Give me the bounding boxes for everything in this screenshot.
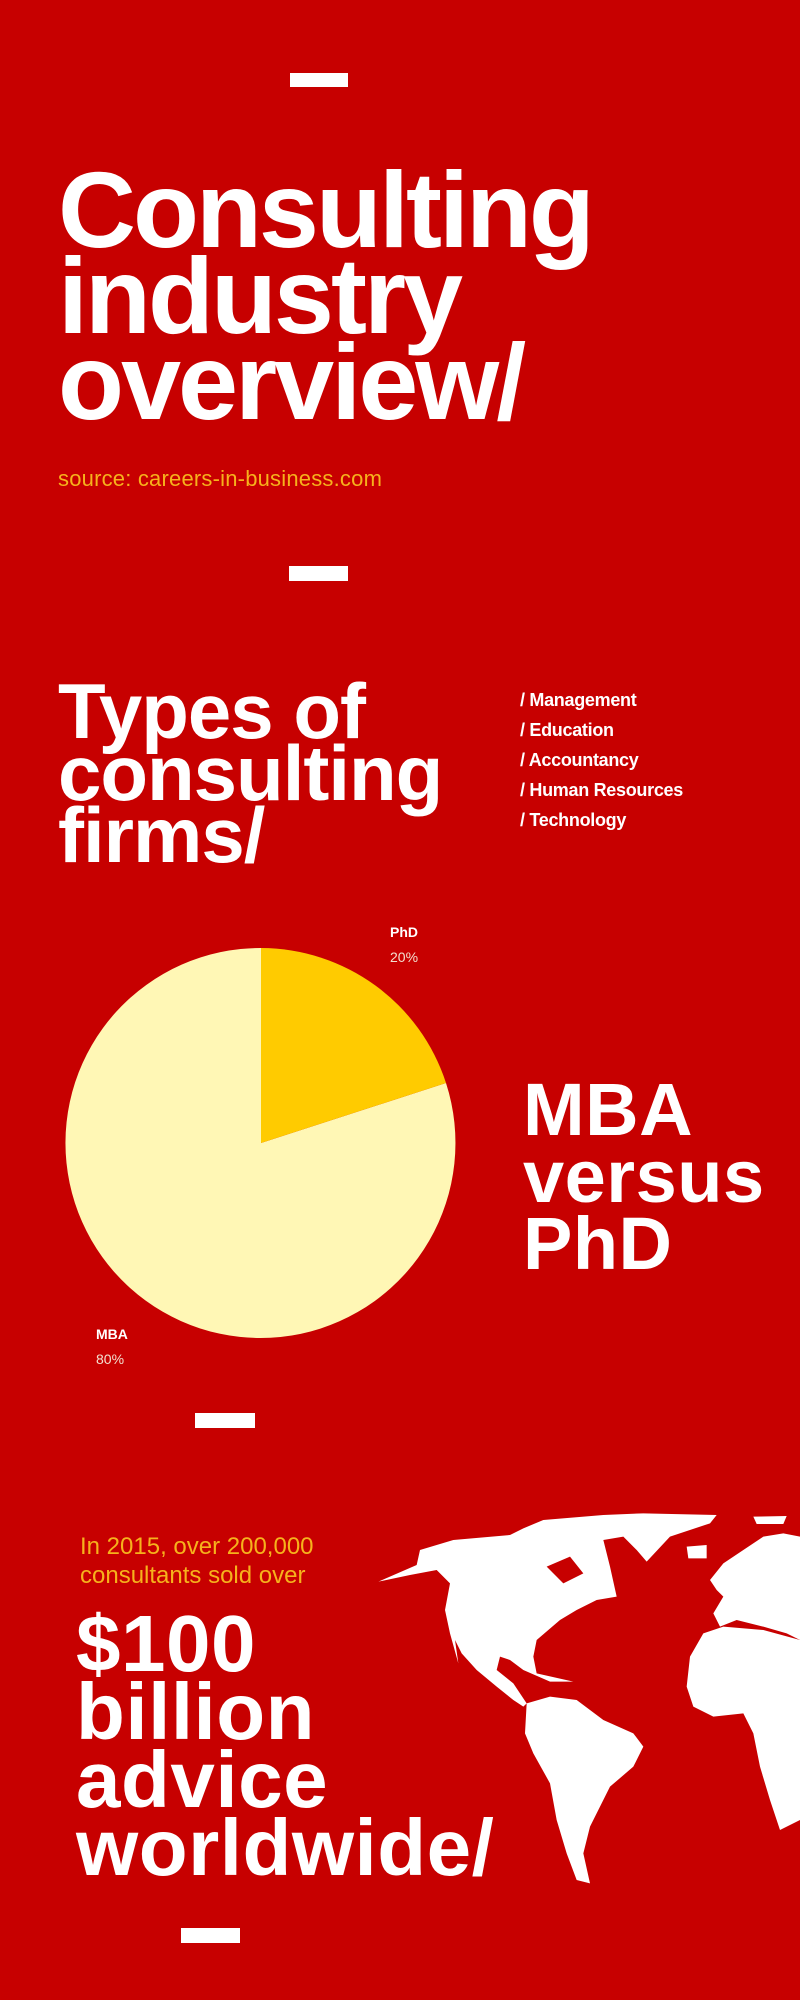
divider dash 2 <box>289 566 348 581</box>
label: PhD 20%: PhD <box>390 924 418 940</box>
title: industry <box>58 235 460 356</box>
heading: MBA versus PhD: PhD <box>523 1202 672 1285</box>
heading: MBA versus PhD: versus <box>523 1135 765 1218</box>
label: MBA 80%: MBA <box>96 1326 128 1342</box>
list: firm types <box>520 690 683 830</box>
headline: $100 billion advice worldwide: advice <box>76 1735 328 1824</box>
intro text: consultants: In 2015, over 200,000 <box>80 1533 314 1560</box>
heading: types of consulting firms <box>58 667 442 879</box>
list: firm types: / Human Resources <box>520 780 683 800</box>
icon: world map <box>378 1513 800 1884</box>
divider dash 4 <box>181 1928 240 1943</box>
heading: types of consulting firms: firms/ <box>58 791 264 879</box>
North America <box>378 1513 800 1883</box>
heading: MBA versus PhD <box>523 1068 765 1285</box>
pie chart: MBA vs PhD <box>65 948 456 1338</box>
intro text: consultants: consultants sold over <box>80 1562 305 1589</box>
label: MBA 80% <box>96 1326 128 1367</box>
headline: $100 billion advice worldwide: billion <box>76 1667 315 1756</box>
list: firm types: / Technology <box>520 810 626 830</box>
headline: $100 billion advice worldwide: worldwide/ <box>76 1803 494 1892</box>
slice: PhD 20% <box>261 948 446 1143</box>
title: Consulting <box>58 149 592 270</box>
label: PhD 20% <box>390 924 418 965</box>
heading: types of consulting firms: Types of <box>58 667 365 755</box>
heading: types of consulting firms: consulting <box>58 729 442 817</box>
headline: $100 billion advice worldwide <box>76 1599 494 1892</box>
list: firm types: / Accountancy <box>520 750 638 770</box>
list: firm types: / Management <box>520 690 636 710</box>
list: firm types: / Education <box>520 720 614 740</box>
source text: source: careers-in-business.com <box>58 466 382 491</box>
heading: MBA versus PhD: MBA <box>523 1068 693 1151</box>
slice: MBA 80% <box>65 948 455 1338</box>
headline: $100 billion advice worldwide: $100 <box>76 1599 256 1688</box>
label: PhD 20%: 20% <box>390 949 418 965</box>
label: MBA 80%: 80% <box>96 1351 124 1367</box>
intro text: consultants <box>80 1533 314 1589</box>
title <box>58 149 592 442</box>
divider dash 3 <box>195 1413 255 1428</box>
title: overview/ <box>58 321 523 442</box>
divider dash 1 <box>290 73 348 87</box>
